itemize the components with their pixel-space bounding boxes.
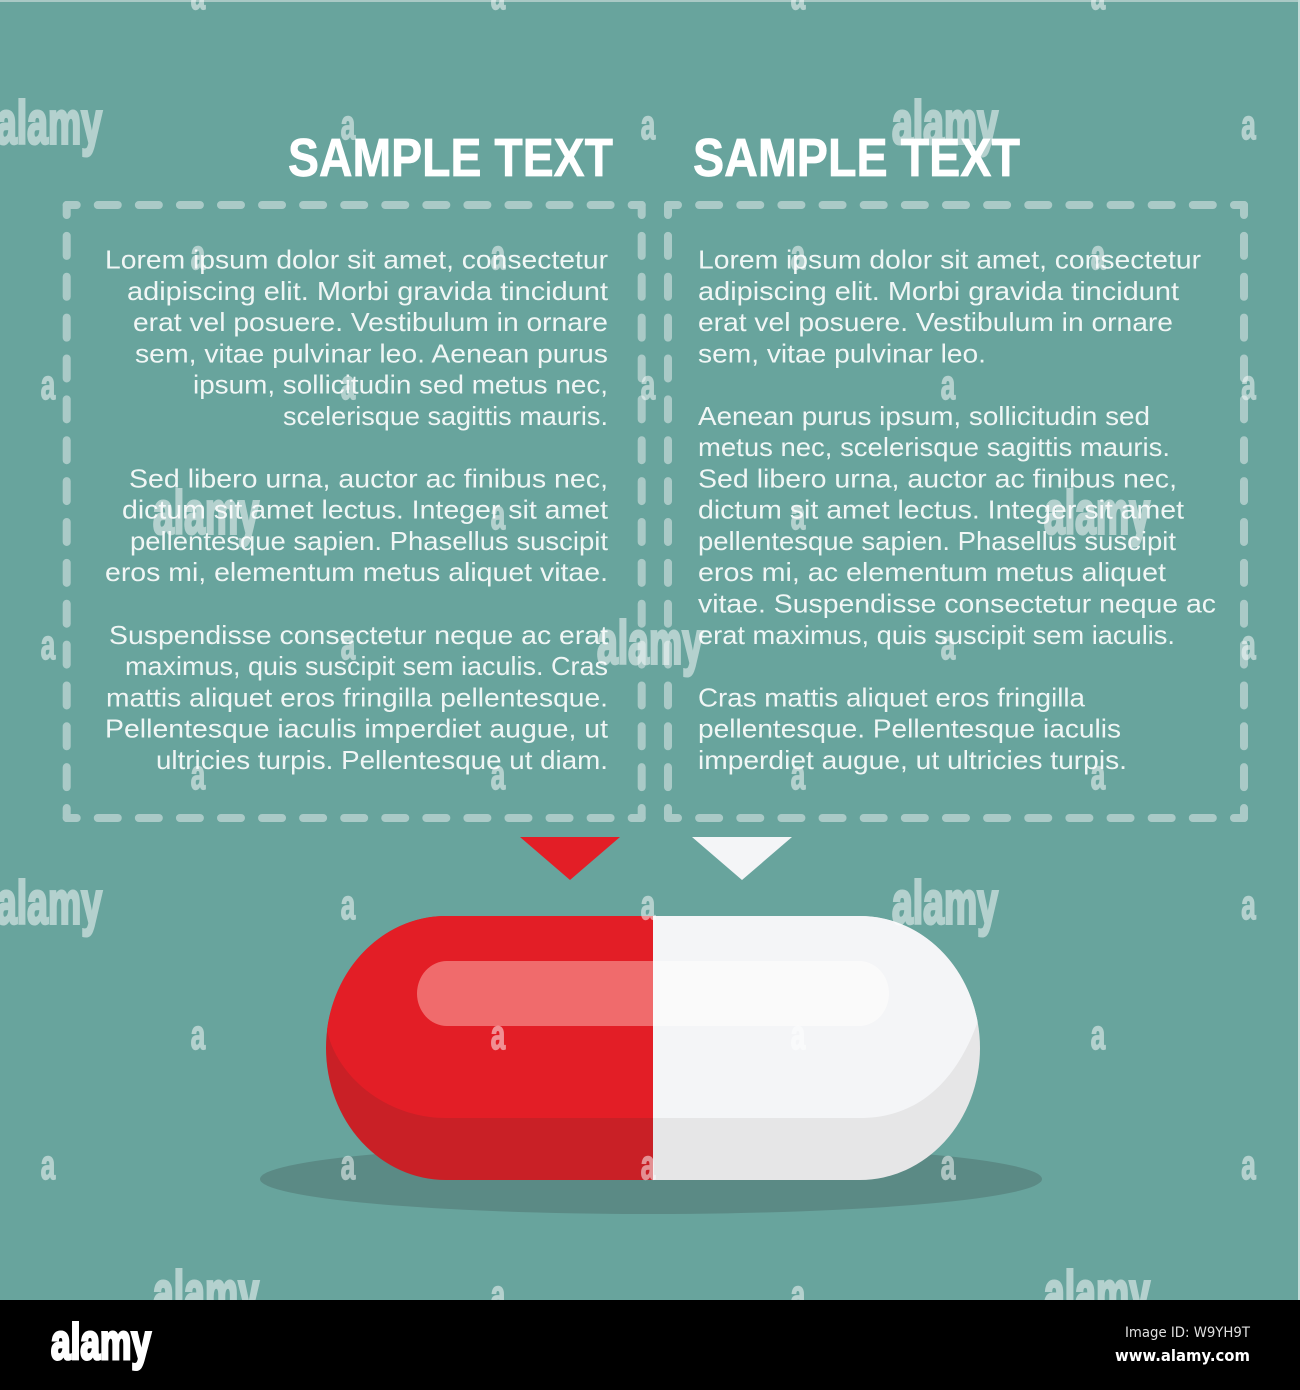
watermark tiles: a	[1091, 1011, 1106, 1058]
text block: left column: Suspendisse consectetur neque ac erat	[109, 620, 609, 650]
text block: right column: adipiscing elit. Morbi gravida tincidunt	[698, 276, 1180, 306]
text block: right column: erat vel posuere. Vestibulum in ornare	[698, 307, 1173, 337]
text block: left column: adipiscing elit. Morbi gravida tincidunt	[127, 276, 609, 306]
text block: left column: dictum sit amet lectus. Integer sit amet	[122, 495, 609, 525]
watermark tiles: a	[191, 751, 206, 798]
text block: right column: metus nec, scelerisque sagittis mauris.	[698, 432, 1170, 462]
text block: left column: maximus, quis suscipit sem iaculis. Cras	[125, 651, 608, 681]
watermark tiles: a	[41, 621, 56, 668]
arrow: red pointer	[520, 837, 620, 880]
text block: right column: vitae. Suspendisse consectetur neque ac	[698, 588, 1216, 618]
watermark tiles: a	[1241, 881, 1256, 928]
heading: left sample text: SAMPLE TEXT	[288, 128, 613, 188]
panel: right dashed box	[668, 205, 1244, 818]
watermark tiles: a	[791, 751, 806, 798]
watermark tiles: a	[491, 1271, 506, 1318]
watermark tiles: a	[1091, 231, 1106, 278]
watermark tiles: a	[341, 621, 356, 668]
watermark tiles: alamy	[892, 90, 998, 156]
watermark tiles: a	[191, 1011, 206, 1058]
watermark tiles: a	[491, 231, 506, 278]
watermark tiles: a	[941, 621, 956, 668]
text block: right column: Sed libero urna, auctor ac finibus nec,	[698, 463, 1177, 493]
panel: left dashed box	[67, 205, 642, 818]
text block: right column	[698, 244, 1216, 775]
arrow: white pointer	[692, 837, 792, 880]
text block: right column: Aenean purus ipsum, sollicitudin sed	[698, 401, 1150, 431]
watermark tiles: a	[1241, 621, 1256, 668]
text block: right column: sem, vitae pulvinar leo.	[698, 338, 986, 368]
icon: capsule pill	[326, 916, 980, 1180]
text block: right column: Lorem ipsum dolor sit amet, consectetur	[698, 244, 1201, 274]
watermark tiles: a	[1241, 1141, 1256, 1188]
pill shadow	[260, 1144, 1042, 1214]
footer url: www.alamy.com	[1115, 1346, 1250, 1365]
text block: left column: eros mi, elementum metus aliquet vitae.	[105, 557, 608, 587]
text block: right column: imperdiet augue, ut ultricies turpis.	[698, 745, 1127, 775]
watermark tiles: a	[341, 1141, 356, 1188]
footer logo: alamy	[51, 1314, 151, 1370]
watermark tiles: alamy	[0, 870, 102, 936]
text block: right column: pellentesque sapien. Phasellus suscipit	[698, 526, 1177, 556]
watermark tiles: a	[341, 881, 356, 928]
watermark tiles: a	[641, 881, 656, 928]
watermark tiles: a	[1241, 361, 1256, 408]
heading: right sample text: SAMPLE TEXT	[693, 128, 1020, 188]
watermark tiles: alamy	[892, 870, 998, 936]
watermark tiles: a	[641, 101, 656, 148]
watermark tiles: a	[791, 1271, 806, 1318]
watermark tiles: a	[491, 491, 506, 538]
watermark tiles: a	[791, 1011, 806, 1058]
text block: left column: ultricies turpis. Pellentesque ut diam.	[156, 745, 608, 775]
text block: left column: mattis aliquet eros fringilla pellentesque.	[106, 682, 608, 712]
watermark tiles: a	[41, 361, 56, 408]
watermark tiles: a	[491, 1011, 506, 1058]
watermark tiles: alamy	[153, 1260, 259, 1326]
watermark tiles: a	[791, 491, 806, 538]
watermark tiles: a	[491, 751, 506, 798]
watermark tiles: a	[791, 231, 806, 278]
watermark tiles: a	[941, 1141, 956, 1188]
text block: left column: scelerisque sagittis mauris.	[283, 401, 608, 431]
text block: left column: erat vel posuere. Vestibulum in ornare	[133, 307, 608, 337]
text block: right column: erat maximus, quis suscipit sem iaculis.	[698, 620, 1175, 650]
watermark tiles: alamy	[153, 480, 259, 546]
watermark tiles: a	[641, 361, 656, 408]
text block: left column: sem, vitae pulvinar leo. Aenean purus	[135, 338, 608, 368]
watermark tiles: alamy	[1044, 1260, 1150, 1326]
white half	[653, 916, 980, 1180]
watermark tiles: a	[341, 361, 356, 408]
text block: left column	[105, 244, 609, 775]
text block: left column: ipsum, sollicitudin sed metus nec,	[193, 370, 608, 400]
text block: left column: pellentesque sapien. Phasellus suscipit	[130, 526, 609, 556]
watermark tiles: a	[341, 101, 356, 148]
watermark tiles: alamy	[1044, 480, 1150, 546]
text block: right column: pellentesque. Pellentesque iaculis	[698, 714, 1121, 744]
watermark tiles: alamy	[597, 610, 703, 676]
text block: left column: Pellentesque iaculis imperdiet augue, ut	[105, 714, 609, 744]
text block: right column: dictum sit amet lectus. Integer sit amet	[698, 495, 1185, 525]
watermark tiles: alamy	[0, 90, 102, 156]
red half	[326, 916, 653, 1180]
watermark tiles: a	[41, 1141, 56, 1188]
watermark tiles: a	[941, 361, 956, 408]
watermark tiles: a	[641, 1141, 656, 1188]
footer bar	[0, 1300, 1300, 1390]
text block: right column: Cras mattis aliquet eros fringilla	[698, 682, 1086, 712]
footer image id: Image ID: W9YH9T	[1125, 1325, 1250, 1341]
text block: left column: Lorem ipsum dolor sit amet, consectetur	[105, 244, 608, 274]
watermark tiles: a	[191, 231, 206, 278]
text block: left column: Sed libero urna, auctor ac finibus nec,	[129, 463, 608, 493]
text block: right column: eros mi, ac elementum metus aliquet	[698, 557, 1167, 587]
watermark tiles: a	[1241, 101, 1256, 148]
watermark tiles: a	[1091, 751, 1106, 798]
